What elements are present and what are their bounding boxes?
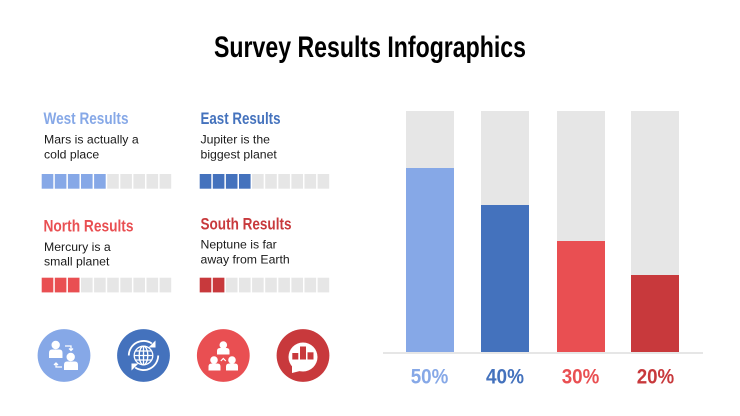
text: south description: Neptune is far <box>200 237 277 251</box>
panel: east results <box>200 109 329 189</box>
text: west description: cold place <box>44 147 99 161</box>
panel: west results <box>42 109 171 189</box>
icon: globe with arrows <box>117 329 170 382</box>
bar chart <box>383 111 703 388</box>
label: 50%: 50% <box>411 366 449 388</box>
bar: 20% <box>631 111 679 352</box>
heading: west: West Results <box>44 109 128 128</box>
title: Survey Results Infographics <box>214 31 526 64</box>
text: north description: small planet <box>44 255 110 269</box>
text: south description: away from Earth <box>200 252 290 266</box>
progress: east 4 of 10 <box>200 174 329 189</box>
icon: people exchange <box>38 329 90 382</box>
heading: north: North Results <box>44 217 134 236</box>
progress: west 5 of 10 <box>42 174 171 189</box>
label: 30%: 30% <box>562 366 600 388</box>
panel: north results <box>42 217 171 292</box>
text: north description: Mercury is a <box>44 240 111 254</box>
bar: 30% <box>557 111 605 352</box>
heading: south: South Results <box>200 214 292 234</box>
progress: south 2 of 10 <box>200 278 329 292</box>
panel: south results <box>200 214 329 292</box>
bar: 40% <box>481 111 529 352</box>
progress: north 3 of 10 <box>42 278 171 292</box>
text: east description: biggest planet <box>200 147 277 161</box>
heading: east: East Results <box>200 109 280 128</box>
label: 40%: 40% <box>486 366 524 388</box>
bar: 50% <box>406 111 454 352</box>
icon: team hierarchy <box>197 329 250 382</box>
icon: speech bubble with bars <box>277 329 329 382</box>
text: east description: Jupiter is the <box>200 132 270 146</box>
label: 20%: 20% <box>637 366 674 388</box>
text: west description: Mars is actually a <box>44 132 139 146</box>
